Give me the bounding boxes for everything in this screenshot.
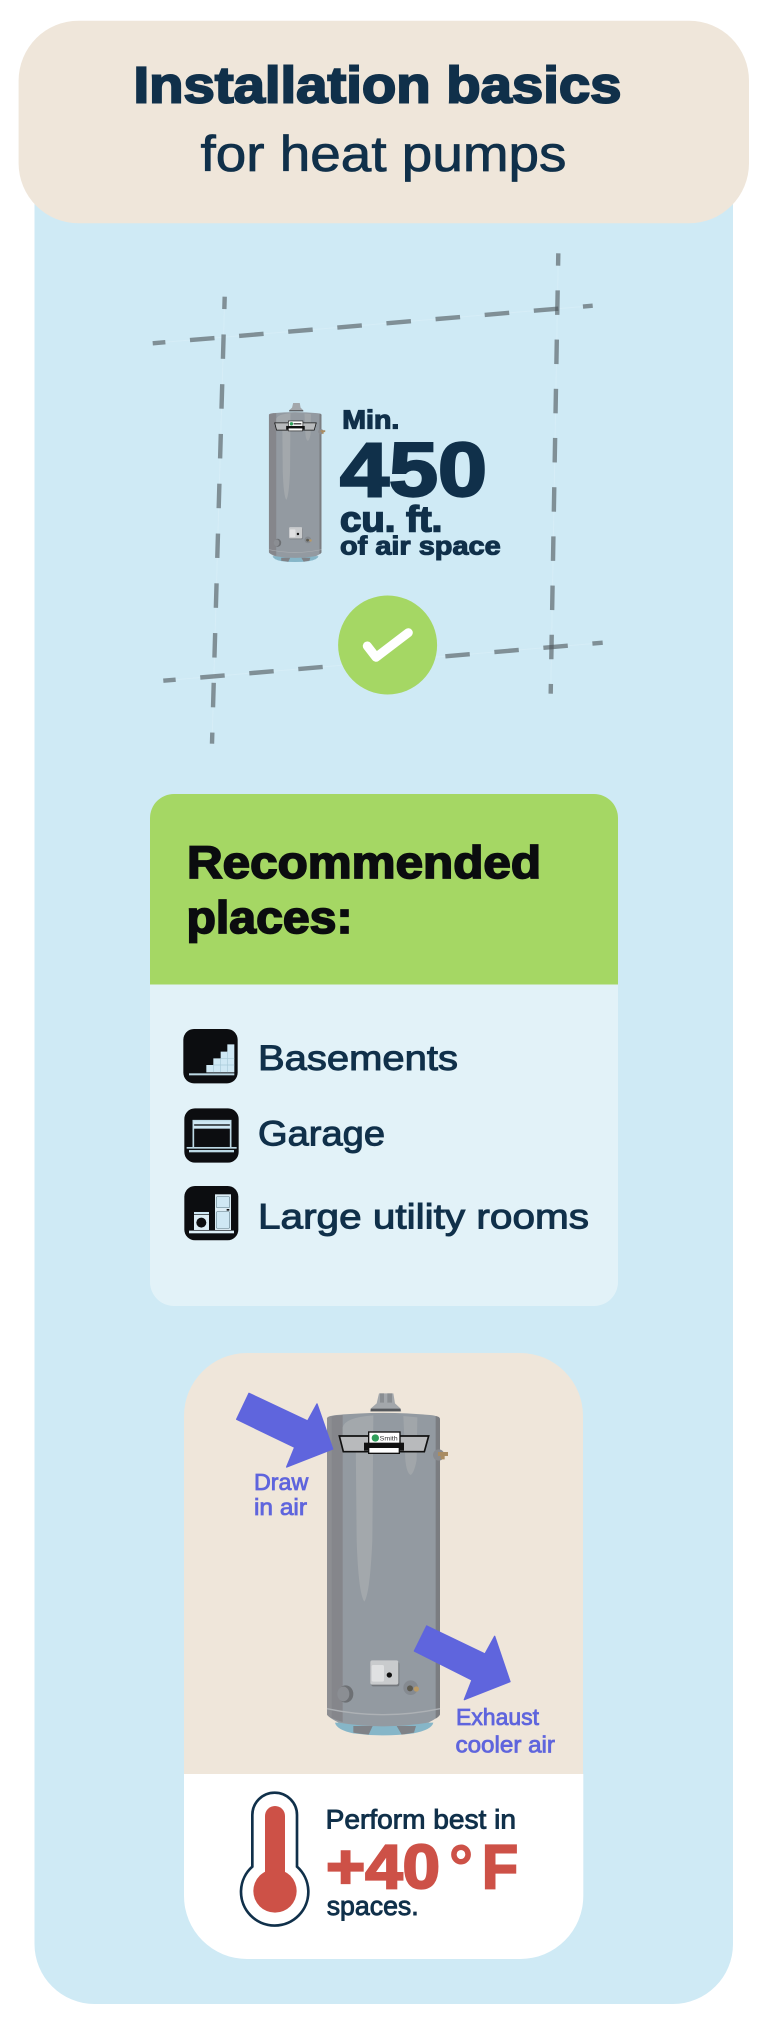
icon: garage bbox=[184, 1108, 239, 1163]
text: perform best in +40°F spaces: ° bbox=[449, 1833, 473, 1902]
text: perform best in +40°F spaces: F bbox=[482, 1833, 518, 1902]
arrow: exhaust cooler air bbox=[414, 1626, 510, 1700]
diagram: room outline dashed lines bbox=[153, 253, 603, 744]
subtitle: for heat pumps bbox=[200, 126, 566, 182]
icon: green check badge bbox=[338, 596, 437, 694]
text: perform best in +40°F spaces: +40 bbox=[326, 1833, 440, 1902]
text: perform best in +40°F spaces: spaces. bbox=[327, 1891, 419, 1921]
label: exhaust cooler air bbox=[456, 1704, 555, 1757]
text: min 450 cu. ft. of air space: Min. bbox=[342, 406, 399, 434]
heading: recommended places: places: bbox=[186, 892, 352, 943]
icon: small water heater bbox=[269, 403, 325, 562]
text: min 450 cu. ft. of air space: of air space bbox=[340, 530, 501, 560]
text: perform best in +40°F spaces bbox=[326, 1804, 518, 1921]
label: exhaust cooler air: cooler air bbox=[456, 1731, 555, 1757]
arrow: draw in air bbox=[237, 1393, 333, 1467]
icon: thermometer bbox=[241, 1793, 308, 1926]
panel: recommended places bbox=[150, 794, 618, 1306]
panel: performance strip bbox=[184, 1774, 583, 1959]
heading: recommended places bbox=[186, 837, 541, 943]
title: Installation basics bbox=[134, 57, 622, 114]
icon: large water heater bbox=[327, 1393, 448, 1735]
label: exhaust cooler air: Exhaust bbox=[456, 1704, 540, 1730]
panel: title banner bbox=[19, 21, 749, 223]
text: perform best in +40°F spaces: Perform best in bbox=[326, 1804, 516, 1834]
panel: heat pump operation card bbox=[184, 1353, 583, 1959]
label: draw in air: in air bbox=[254, 1494, 307, 1520]
heading: recommended places: Recommended bbox=[187, 837, 541, 888]
icon: utility room bbox=[184, 1186, 238, 1240]
label: draw in air bbox=[254, 1469, 309, 1520]
label: draw in air: Draw bbox=[254, 1469, 309, 1495]
text: min 450 cu. ft. of air space: cu. ft. bbox=[340, 499, 442, 540]
text: min 450 cu. ft. of air space bbox=[340, 406, 501, 560]
panel header bbox=[150, 794, 618, 984]
list item: garage: Garage bbox=[258, 1115, 385, 1154]
list item: large utility rooms: Large utility rooms bbox=[258, 1197, 589, 1236]
list item: basements: Basements bbox=[258, 1039, 458, 1078]
icon: basement stairs bbox=[183, 1029, 238, 1083]
text: min 450 cu. ft. of air space: 450 bbox=[340, 428, 487, 513]
icon: large water heater: Smith bbox=[380, 1435, 398, 1442]
